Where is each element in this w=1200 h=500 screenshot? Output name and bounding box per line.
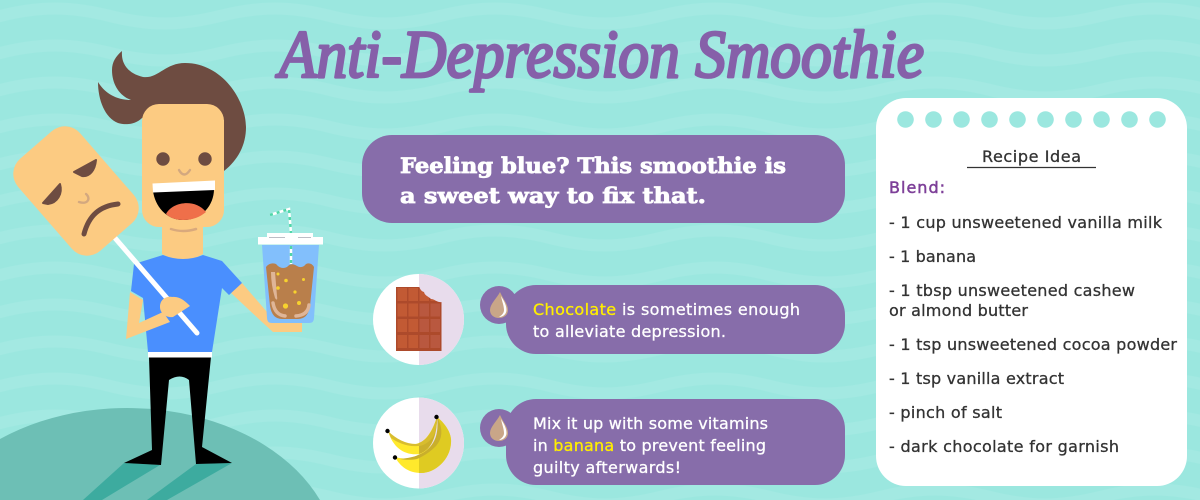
neck <box>162 225 203 260</box>
icon: drop <box>490 292 508 318</box>
blend label: Blend: <box>889 178 945 197</box>
hill <box>0 408 320 500</box>
eyes <box>156 152 212 166</box>
ingredients list <box>889 213 1177 456</box>
ingredients list: - dark chocolate for garnish <box>889 437 1119 456</box>
icon: banana <box>373 398 464 488</box>
neck crease <box>171 229 196 231</box>
left arm <box>126 292 170 339</box>
headline bubble <box>362 135 845 223</box>
hair <box>98 51 246 171</box>
banana tip bubble: in banana to prevent feeling <box>533 436 766 455</box>
pants <box>124 357 232 465</box>
title: Anti-Depression Smoothie <box>275 16 924 92</box>
mask stick <box>115 238 197 333</box>
banana tip bubble: guilty afterwards! <box>533 458 681 477</box>
illustration: man holding sad mask and smoothie <box>0 51 323 500</box>
ingredients list: - pinch of salt <box>889 403 1002 422</box>
shirt <box>131 255 242 352</box>
recipe heading: Recipe Idea <box>982 147 1081 166</box>
headline bubble: Feeling blue? This smoothie is <box>400 153 786 178</box>
head <box>142 104 224 227</box>
icon: chocolate bar <box>373 274 464 365</box>
nose <box>179 170 190 174</box>
right arm <box>230 283 302 332</box>
hand <box>160 297 190 317</box>
chocolate tip bubble: Chocolate is sometimes enough <box>533 300 800 319</box>
icon: drop <box>490 415 508 441</box>
belt <box>148 352 212 358</box>
sad mask <box>5 118 147 264</box>
panel: recipe card <box>876 98 1187 486</box>
banana tip bubble <box>480 399 845 485</box>
ingredients list: - 1 tsp unsweetened cocoa powder <box>889 335 1177 354</box>
ingredients list: - 1 tsp vanilla extract <box>889 369 1064 388</box>
ingredients list: or almond butter <box>889 301 1028 320</box>
smoothie cup <box>258 209 323 323</box>
ingredients list: - 1 tbsp unsweetened cashew <box>889 281 1135 300</box>
chocolate tip bubble: to alleviate depression. <box>533 322 726 341</box>
notebook holes <box>897 111 1166 128</box>
ingredients list: - 1 cup unsweetened vanilla milk <box>889 213 1163 232</box>
ingredients list: - 1 banana <box>889 247 976 266</box>
headline bubble: a sweet way to fix that. <box>400 183 706 208</box>
mouth <box>152 180 215 220</box>
foot shadows <box>83 463 232 500</box>
chocolate tip bubble <box>480 285 845 354</box>
banana tip bubble: Mix it up with some vitamins <box>533 414 768 433</box>
